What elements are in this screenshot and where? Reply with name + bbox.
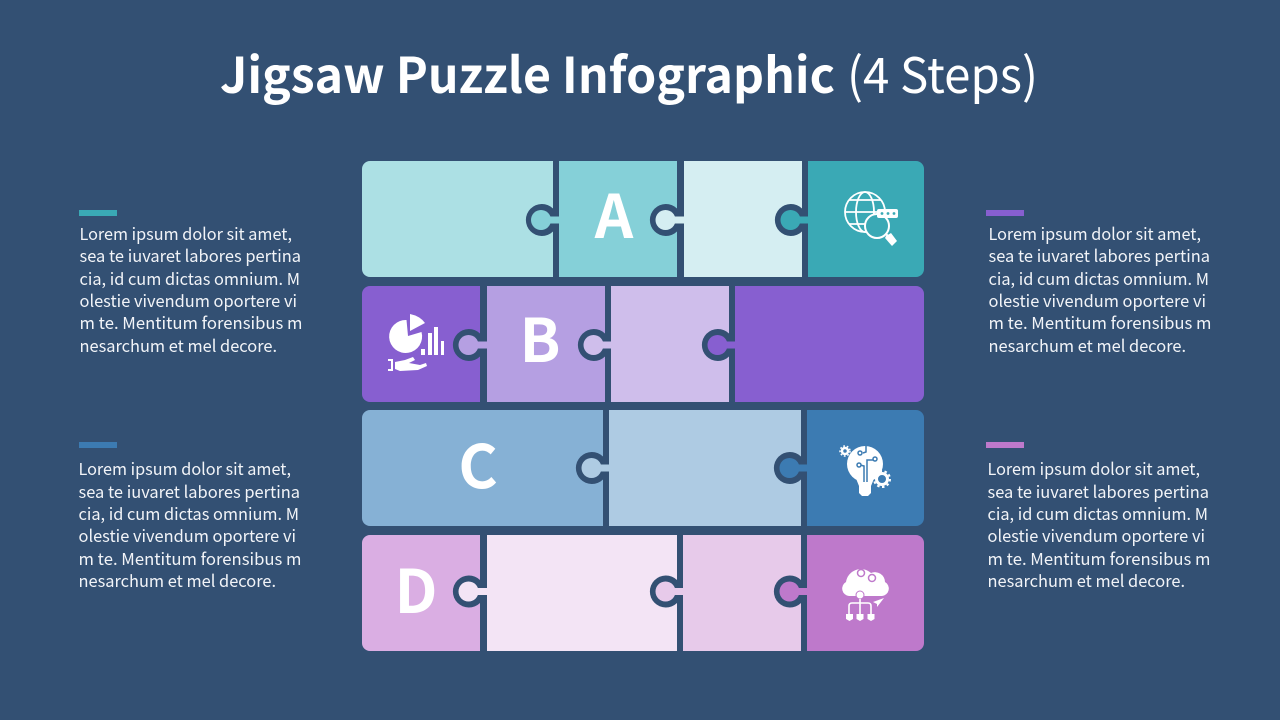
icon: globe search: [845, 192, 898, 246]
text block: bottom right: sea te iuvaret labores pertina: [988, 479, 1209, 503]
text block: top right: m te. Mentitum forensibus m: [988, 310, 1212, 334]
letter B: B: [520, 293, 560, 380]
text block: top left: cia, id cum dictas omnium. M: [80, 266, 300, 290]
text block: top left: [79, 210, 302, 357]
text block: top left: Lorem ipsum dolor sit amet,: [80, 221, 292, 245]
text block: top right: sea te iuvaret labores pertina: [988, 243, 1210, 267]
text block: bottom right: olestie vivendum oportere vi: [988, 523, 1205, 547]
puzzle row C: [362, 410, 924, 526]
text block: top left: sea te iuvaret labores pertina: [80, 243, 301, 267]
text block: top right: nesarchum et mel decore.: [988, 333, 1186, 357]
text block: bottom right: [986, 442, 1210, 592]
text block: bottom left: nesarchum et mel decore.: [78, 568, 276, 592]
icon: cloud network: [842, 569, 889, 621]
icon: pie chart in hand: [388, 314, 444, 371]
title: Jigsaw Puzzle Infographic: [220, 37, 835, 108]
text block: bottom left: cia, id cum dictas omnium. M: [78, 501, 299, 525]
text block: top left: m te. Mentitum forensibus m: [80, 310, 302, 334]
text block: bottom left: sea te iuvaret labores pertina: [78, 479, 300, 503]
letter D: D: [395, 544, 437, 631]
text block: bottom right: m te. Mentitum forensibus m: [988, 546, 1210, 570]
text block: top left: nesarchum et mel decore.: [80, 333, 277, 357]
puzzle row D: [362, 535, 924, 651]
text block: bottom right: nesarchum et mel decore.: [988, 568, 1185, 592]
puzzle row A: [362, 161, 924, 277]
text block: bottom right: cia, id cum dictas omnium. M: [988, 501, 1208, 525]
text block: top right: cia, id cum dictas omnium. M: [988, 266, 1209, 290]
text block: top left: olestie vivendum oportere vi: [80, 288, 297, 312]
text block: bottom left: Lorem ipsum dolor sit amet,: [78, 456, 291, 480]
title: (4 Steps): [847, 37, 1038, 108]
letter A: A: [594, 169, 634, 256]
text block: top right: [986, 210, 1212, 357]
icon: lightbulb circuit: [840, 446, 890, 496]
puzzle row B: [362, 286, 924, 402]
text block: bottom left: [78, 442, 302, 592]
text block: top right: Lorem ipsum dolor sit amet,: [988, 221, 1201, 245]
text block: bottom right: Lorem ipsum dolor sit amet,: [988, 456, 1200, 480]
text block: top right: olestie vivendum oportere vi: [988, 288, 1206, 312]
text block: bottom left: m te. Mentitum forensibus m: [78, 546, 302, 570]
letter C: C: [458, 419, 498, 506]
text block: bottom left: olestie vivendum oportere vi: [78, 523, 296, 547]
